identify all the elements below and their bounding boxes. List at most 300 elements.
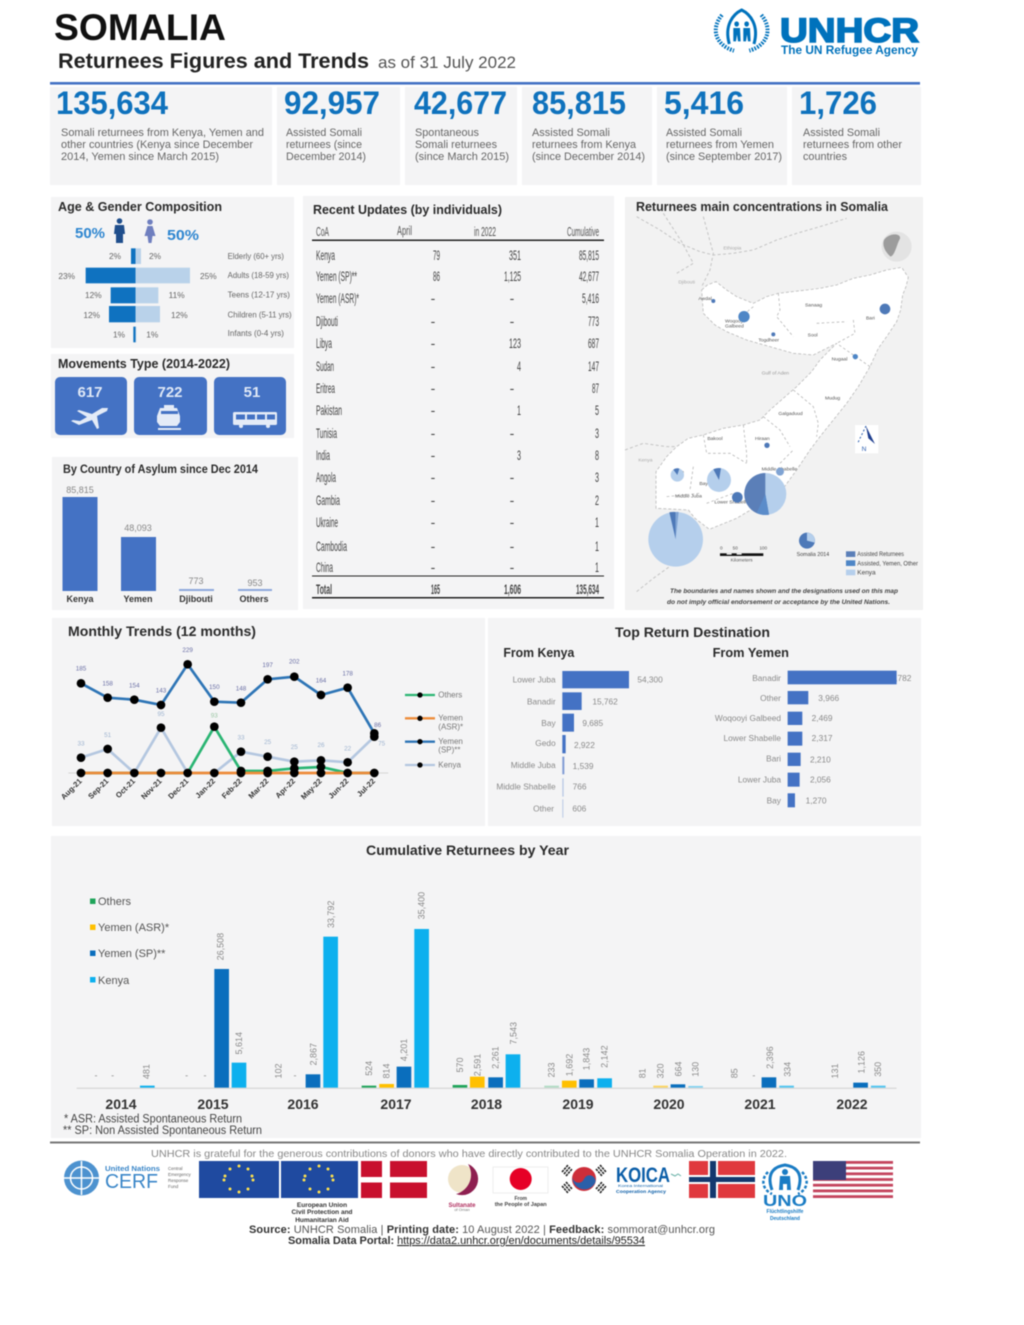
- bar chart: from Kenya: 606: [572, 803, 587, 813]
- logo: UNO Fluechtlingshilfe: Deutschland: [770, 1216, 800, 1222]
- table rows: 2: [595, 492, 599, 508]
- logo: Japan: From: [514, 1196, 528, 1202]
- year axis labels: 2020: [653, 1096, 685, 1112]
- table rows: Yemen (SP)**: [316, 268, 357, 284]
- map disclaimer: do not imply official endorsement or acceptance by the United Nations.: [667, 599, 890, 606]
- map of Somalia: Mudug: [825, 395, 840, 401]
- bar chart: from Yemen: 2,469: [812, 713, 833, 723]
- table rows: -: [431, 514, 436, 530]
- line chart: monthly trends: 25: [291, 744, 298, 751]
- bar chart: from Kenya: Other: [533, 803, 554, 813]
- bar chart: from Kenya: From Kenya: [503, 645, 575, 660]
- map of Somalia: Galgaduud: [778, 411, 803, 417]
- bar chart: from Kenya: 766: [573, 782, 587, 792]
- line chart: monthly trends: 185: [76, 666, 87, 673]
- bar chart: cumulative by year: 320: [656, 1063, 666, 1078]
- panel: key figure total: 2014, Yemen since March 2015): [61, 151, 219, 163]
- panel: key figure from Yemen: [657, 85, 787, 185]
- table total row: [316, 581, 599, 597]
- footnotes: ** SP: Non Assisted Spontaneous Return: [63, 1125, 262, 1137]
- legend: monthly trends: (ASR)*: [438, 722, 463, 731]
- table rows: Libya: [316, 335, 332, 351]
- line chart: monthly trends: 154: [129, 682, 140, 689]
- table rows: 1: [517, 402, 521, 418]
- table rows: -: [431, 380, 436, 396]
- table total row: 165: [431, 581, 440, 597]
- table rows: 123: [509, 335, 521, 351]
- logo: Sultanate of Oman: of Oman: [454, 1207, 470, 1212]
- female share: 50%: [167, 227, 199, 244]
- line chart: monthly trends: 51: [104, 732, 112, 739]
- logo: EU flags: European Union: [297, 1202, 347, 1209]
- table rows: -: [431, 313, 436, 329]
- map legend: Assisted, Yemen, Other: [857, 561, 918, 567]
- scale bar: [720, 545, 829, 562]
- line chart: monthly trends: 202: [289, 659, 300, 666]
- bar chart: cumulative by year: 102: [273, 1063, 283, 1078]
- bar chart: from Kenya: Middle Juba: [511, 760, 556, 770]
- bar chart: cumulative by year: 2,591: [472, 1054, 482, 1076]
- bar chart: cumulative by year: 81: [638, 1068, 648, 1078]
- bar chart: cumulative by year: 1,126: [857, 1051, 867, 1074]
- line chart: monthly trends: Mar-22: [247, 777, 270, 801]
- legend: cumulative: Yemen (SP)**: [98, 948, 166, 960]
- map of Somalia: Middle Juba: [675, 493, 702, 499]
- map of Somalia: Galbeed: [725, 323, 744, 329]
- table rows: -: [431, 492, 436, 508]
- panel: key figure total: Somali returnees from Kenya, Yemen and: [61, 127, 264, 139]
- title: SOMALIA: [54, 7, 226, 48]
- logo: UNHCR: UNHCR: [780, 12, 919, 50]
- table rows: Eritrea: [316, 380, 335, 396]
- panel: key figure spontaneous: Spontaneous: [415, 127, 479, 139]
- bar chart: from Kenya: Bay: [541, 718, 556, 728]
- table rows: -: [510, 380, 515, 396]
- panel: key figure assisted: Assisted Somali: [286, 127, 362, 139]
- population pyramid: 12%: [85, 290, 102, 300]
- population pyramid: Infants (0-4 yrs): [228, 328, 284, 338]
- flag: USA: [813, 1161, 893, 1198]
- year axis labels: 2022: [836, 1096, 868, 1112]
- logo: EU flags: Humanitarian Aid: [295, 1217, 349, 1224]
- map of Somalia: Awdal: [698, 296, 712, 302]
- heading: asylum: By Country of Asylum since Dec 2014: [63, 464, 259, 476]
- panel: key figure assisted: December 2014): [286, 151, 366, 163]
- panel: key figure from Kenya: returnees from Kenya: [532, 139, 637, 151]
- table rows: 3: [595, 469, 599, 485]
- bar chart: cumulative by year: 33,792: [326, 901, 336, 928]
- table rows: 79: [433, 247, 440, 263]
- line chart: monthly trends: Apr-22: [274, 777, 297, 800]
- bar chart: from Yemen: 2,056: [810, 775, 831, 785]
- table rows: -: [431, 335, 436, 351]
- population pyramid: 12%: [171, 310, 188, 320]
- bar chart: from Yemen: Bari: [766, 753, 781, 763]
- line chart: monthly trends: Aug-21: [59, 776, 84, 801]
- panel: recent updates table: 87: [592, 380, 599, 396]
- panel: top return destination: [488, 618, 921, 826]
- table rows: 8: [595, 447, 599, 463]
- legend: monthly trends: [405, 690, 463, 769]
- bar chart: from Kenya: 54,300: [637, 675, 663, 685]
- line chart: monthly trends: 33: [77, 741, 85, 748]
- line chart: monthly trends: Jun-22: [327, 777, 350, 801]
- globe inset: [882, 232, 912, 262]
- bar chart: cumulative by year: 2,867: [308, 1043, 318, 1066]
- population pyramid: 12%: [83, 310, 101, 320]
- map of Somalia: Togdheer: [758, 338, 779, 344]
- line chart: monthly trends: Jul-22: [355, 777, 377, 799]
- bar chart: from Yemen: Other: [760, 693, 781, 703]
- map disclaimer: The boundaries and names shown and the designations used on this map: [670, 588, 898, 595]
- line chart: monthly trends: 25: [264, 739, 272, 746]
- bar chart: cumulative by year: 5,614: [234, 1032, 244, 1055]
- map of Somalia: Bakool: [707, 436, 723, 442]
- bar chart: cumulative by year: 85: [729, 1068, 739, 1078]
- logo: EU flags: Civil Protection and: [291, 1209, 353, 1216]
- population pyramid: [58, 248, 292, 342]
- bar chart: cumulative by year: 2,396: [765, 1046, 775, 1069]
- bar chart: cumulative by year: 26,508: [216, 933, 226, 960]
- logo: CERF: [64, 1160, 192, 1196]
- bar chart: asylum: Kenya: [66, 594, 94, 604]
- legend: cumulative: [90, 896, 170, 987]
- table rows: Gambia: [316, 492, 340, 508]
- bar chart: cumulative by year: -: [752, 1070, 755, 1080]
- logo: KOICA: Cooperation Agency: [616, 1189, 667, 1194]
- panel: key figure from Kenya: [522, 85, 652, 185]
- bar chart: from Yemen: 2,210: [810, 755, 831, 765]
- bar chart: from Yemen: 2,317: [812, 733, 833, 743]
- table rows: Djibouti: [316, 313, 338, 329]
- bar chart: cumulative by year: 570: [455, 1057, 465, 1072]
- bar chart: from Kenya: Banadir: [527, 696, 556, 706]
- panel: key figure other countries: 1,726: [799, 85, 877, 121]
- table rows: 1: [595, 538, 599, 554]
- bar chart: cumulative by year: 664: [673, 1061, 683, 1076]
- population pyramid: Teens (12-17 yrs): [228, 290, 290, 300]
- year axis labels: 2016: [287, 1096, 319, 1112]
- population pyramid: 25%: [200, 271, 217, 281]
- panel: key figure from Kenya: (since December 2014): [532, 151, 645, 163]
- panel: key figure spontaneous: Somali returnees: [415, 139, 497, 151]
- panel: map of returnee concentrations: [625, 197, 923, 610]
- panel: recent updates table: Cumulative: [567, 224, 599, 239]
- year axis labels: 2014: [105, 1096, 137, 1112]
- legend: monthly trends: (SP)**: [438, 746, 460, 755]
- table rows: -: [431, 425, 436, 441]
- table rows: -: [510, 313, 515, 329]
- map of Somalia: Gedo: [672, 469, 684, 475]
- line chart: monthly trends: 26: [317, 742, 325, 749]
- map of Somalia: Woqooyi: [725, 319, 744, 325]
- table rows: Yemen (ASR)*: [316, 290, 359, 306]
- heading: cumulative returnees: Cumulative Returnees by Year: [366, 842, 570, 858]
- legend: cumulative: Kenya: [98, 975, 130, 987]
- bar chart: from Yemen: [713, 645, 912, 807]
- heading: top return destination: Top Return Destination: [615, 624, 770, 640]
- map of Somalia: Ethiopia: [723, 245, 742, 251]
- logo: UNO Fluechtlingshilfe: [763, 1165, 807, 1222]
- logo: Japan: [493, 1167, 548, 1208]
- table rows: 351: [509, 247, 521, 263]
- logo: CERF: Fund: [168, 1184, 179, 1189]
- map of Somalia: Lower Shabelle: [714, 499, 749, 505]
- bar chart: from Kenya: Middle Shabelle: [496, 782, 556, 792]
- logo: KOICA: KOICA: [616, 1164, 670, 1187]
- bar chart: from Kenya: [496, 645, 663, 818]
- line chart: monthly trends: 22: [344, 746, 352, 753]
- table rows: -: [431, 447, 436, 463]
- map of Somalia: Hiraan: [755, 436, 770, 442]
- map of Somalia: Kenya: [638, 458, 653, 464]
- scale bar: 0: [720, 545, 723, 550]
- logo: CERF: Central: [168, 1166, 183, 1171]
- panel: monthly trends: [52, 618, 485, 826]
- population pyramid: 1%: [146, 329, 159, 339]
- population pyramid: 1%: [113, 329, 126, 339]
- map of Somalia: Bay: [699, 481, 708, 487]
- female share: [144, 219, 199, 244]
- scale bar: Somalia 2014: [797, 552, 829, 558]
- bar chart: from Kenya: 9,685: [582, 718, 604, 728]
- map legend: Kenya: [857, 571, 876, 577]
- table rows: 4: [517, 358, 521, 374]
- line chart: monthly trends: Sep-21: [86, 776, 111, 801]
- table rows: -: [510, 425, 515, 441]
- bar chart: cumulative by year: -: [185, 1070, 188, 1080]
- line chart: monthly trends: 178: [342, 671, 353, 678]
- table header: in 2022: [474, 224, 496, 239]
- panel: key figure from Yemen: (since September 2017): [666, 151, 782, 163]
- logo: EU flags: [199, 1161, 358, 1224]
- male share: [75, 218, 125, 243]
- data portal line: Somalia Data Portal: https://data2.unhcr.org/en/documents/details/95534: [288, 1235, 645, 1247]
- table rows: -: [431, 358, 436, 374]
- table rows: 5: [595, 402, 599, 418]
- population pyramid: 2%: [149, 251, 162, 261]
- panel: key figure from Yemen: 5,416: [664, 85, 744, 121]
- line chart: monthly trends: 93: [211, 712, 218, 719]
- year axis labels: 2019: [562, 1096, 594, 1112]
- card: road: [214, 377, 286, 435]
- table rows: Angola: [316, 469, 336, 485]
- bar chart: from Kenya: Gedo: [535, 738, 556, 748]
- panel: key figure from Yemen: Assisted Somali: [666, 127, 742, 139]
- table rows: -: [431, 290, 436, 306]
- year axis labels: 2021: [744, 1096, 776, 1112]
- bar chart: cumulative by year: 1,843: [582, 1048, 592, 1070]
- bar chart: from Yemen: Woqooyi Galbeed: [715, 713, 781, 723]
- population pyramid: 2%: [109, 251, 122, 261]
- bar chart: cumulative by year: 130: [691, 1062, 701, 1077]
- logo: UNO Fluechtlingshilfe: Flüchtlingshilfe: [767, 1209, 804, 1215]
- legend: monthly trends: Yemen: [438, 714, 463, 723]
- line chart: monthly trends: 197: [262, 662, 273, 669]
- line chart: monthly trends: 75: [378, 741, 386, 748]
- bar chart: from Kenya: Lower Juba: [513, 675, 556, 685]
- table rows: 86: [433, 268, 440, 284]
- north arrow inset: [855, 425, 878, 453]
- panel: cumulative returnees by year: [51, 836, 921, 1138]
- logo: UNHCR: [716, 10, 919, 57]
- table rows: Kenya: [316, 247, 335, 263]
- table rows: Tunisia: [316, 425, 337, 441]
- table total row: Total: [316, 581, 332, 597]
- table rows: Pakistan: [316, 402, 342, 418]
- bar chart: cumulative by year: 131: [830, 1063, 840, 1078]
- map of Somalia: Sool: [808, 333, 818, 339]
- table rows: 3: [595, 425, 599, 441]
- scale bar: 50: [733, 545, 738, 550]
- bar chart: from Yemen: 20,782: [886, 673, 912, 683]
- panel: key figure spontaneous: (since March 2015): [415, 151, 509, 163]
- heading: map: Returnees main concentrations in Somalia: [636, 199, 889, 214]
- logo: UNHCR: The UN Refugee Agency: [781, 43, 918, 57]
- logo: CERF: United Nations: [105, 1166, 160, 1173]
- flag: Denmark: [361, 1161, 427, 1198]
- logo: Sultanate of Oman: Sultanate: [448, 1203, 476, 1209]
- table rows: Cambodia: [316, 538, 347, 554]
- table rows: -: [431, 469, 436, 485]
- bar chart: cumulative by year: 233: [547, 1062, 557, 1077]
- bar chart: from Kenya: 15,762: [592, 696, 618, 706]
- population pyramid: Elderly (60+ yrs): [228, 251, 284, 261]
- bar chart: from Yemen: 3,966: [818, 693, 840, 703]
- legend: monthly trends: Yemen: [438, 737, 463, 746]
- panel: recent updates table: 147: [588, 358, 599, 374]
- bar chart: cumulative by year: [77, 892, 897, 1088]
- table rows: 1: [595, 514, 599, 530]
- table rows: -: [510, 492, 515, 508]
- line chart: monthly trends: Oct-21: [114, 776, 138, 800]
- north arrow inset: N: [862, 446, 867, 453]
- bar chart: cumulative by year: 7,543: [508, 1022, 518, 1045]
- heading: age and gender: Age & Gender Composition: [58, 199, 222, 214]
- legend: cumulative: Yemen (ASR)*: [98, 922, 170, 934]
- panel: recent updates table: 85,815: [579, 247, 599, 263]
- panel: key figure total: other countries (Kenya since December: [61, 139, 253, 151]
- logo: CERF: Response: [168, 1178, 189, 1183]
- table rows: India: [316, 447, 330, 463]
- bar chart: cumulative by year: -: [111, 1070, 114, 1080]
- bar chart: cumulative by year: 35,400: [417, 892, 427, 919]
- panel: key figure other countries: returnees from other: [803, 139, 902, 151]
- logo: UNO Fluechtlingshilfe: UNO: [763, 1193, 807, 1210]
- map of Somalia: Middle Shabelle: [762, 467, 797, 473]
- line chart: monthly trends: 86: [374, 722, 382, 729]
- bar chart: cumulative by year: 814: [382, 1063, 392, 1078]
- panel: age and gender composition: [51, 197, 294, 348]
- logo: KOICA: Korea International: [618, 1183, 663, 1188]
- panel: recent updates table: 773: [588, 313, 599, 329]
- bar chart: asylum: Others: [239, 594, 269, 604]
- map of Somalia: Bari: [866, 315, 875, 321]
- bar chart: cumulative by year: -: [293, 1070, 296, 1080]
- table rows: -: [431, 559, 436, 575]
- panel: by country of asylum: [52, 457, 298, 610]
- bar chart: from Yemen: From Yemen: [713, 645, 789, 660]
- bar chart: asylum: Djibouti: [179, 594, 213, 604]
- year axis labels: 2017: [380, 1096, 412, 1112]
- table rows: China: [316, 559, 333, 575]
- bar chart: cumulative by year: 524: [364, 1061, 374, 1076]
- subtitle: [58, 50, 516, 73]
- card: sea: 722: [157, 384, 183, 401]
- line chart: monthly trends: May-22: [299, 777, 324, 801]
- bar chart: cumulative by year: -: [94, 1070, 97, 1080]
- card: sea: [134, 377, 207, 435]
- panel: key figure other countries: [792, 85, 921, 185]
- bar chart: from Yemen: Banadir: [752, 673, 781, 683]
- footnotes: [63, 1114, 262, 1137]
- heading: movements: Movements Type (2014-2022): [58, 356, 230, 371]
- bar chart: cumulative by year: 4,201: [399, 1039, 409, 1061]
- table rows: 1,125: [504, 268, 521, 284]
- panel: key figure from Kenya: Assisted Somali: [532, 127, 610, 139]
- line chart: monthly trends: Dec-21: [166, 776, 191, 801]
- map of Somalia: Gulf of Aden: [762, 370, 789, 376]
- bar chart: cumulative by year: 334: [782, 1062, 792, 1077]
- bar chart: cumulative by year: 2,142: [599, 1045, 609, 1068]
- panel: key figure assisted: returnees (since: [286, 139, 362, 151]
- table rows: -: [510, 469, 515, 485]
- bar chart: cumulative by year: 1,692: [564, 1054, 574, 1076]
- panel: key figure spontaneous: [405, 85, 517, 185]
- panel: key figure other countries: countries: [803, 151, 847, 163]
- panel: recent updates table: 135,634: [576, 581, 599, 597]
- bar chart: from Yemen: Lower Shabelle: [724, 733, 781, 743]
- line chart: monthly trends: Feb-22: [220, 777, 244, 801]
- bar chart: from Yemen: 1,270: [806, 795, 827, 805]
- line chart: monthly trends: 33: [237, 734, 245, 741]
- table rows: -: [510, 538, 515, 554]
- card: air: [55, 377, 127, 435]
- line chart: monthly trends: [59, 647, 463, 801]
- table rows: -: [510, 514, 515, 530]
- scale bar: Kilometers: [731, 557, 753, 562]
- legend: monthly trends: Others: [438, 690, 462, 699]
- card: road: 51: [244, 384, 260, 401]
- table rows: -: [510, 559, 515, 575]
- bar chart: cumulative by year: 2,261: [491, 1046, 501, 1069]
- panel: key figure from Kenya: 85,815: [532, 85, 626, 121]
- line chart: monthly trends: Nov-21: [139, 776, 164, 801]
- line chart: monthly trends: 158: [102, 680, 113, 687]
- panel: movements type: [51, 354, 294, 438]
- panel: recent updates table: 5,416: [582, 290, 599, 306]
- panel: key figure total: [50, 85, 272, 185]
- map of Somalia: Nugaal: [832, 357, 847, 363]
- line chart: monthly trends: 143: [156, 687, 167, 694]
- population pyramid: Children (5-11 yrs): [228, 310, 292, 320]
- subtitle: as of 31 July 2022: [378, 54, 516, 72]
- population pyramid: 11%: [169, 290, 185, 300]
- table header: [316, 223, 599, 239]
- legend: cumulative: Others: [98, 896, 132, 908]
- bar chart: asylum: Yemen: [123, 594, 153, 604]
- bar chart: asylum: 773: [188, 576, 204, 586]
- bar chart: asylum: [62, 485, 272, 604]
- footer rule: [50, 1142, 920, 1144]
- legend: monthly trends: Kenya: [438, 760, 461, 769]
- line chart: monthly trends: 95: [157, 711, 165, 718]
- year axis labels: 2015: [197, 1096, 229, 1112]
- logo: CERF: Emergency: [168, 1172, 192, 1177]
- table rows: 1: [595, 559, 599, 575]
- bar chart: cumulative by year: 481: [142, 1064, 152, 1079]
- panel: key figure spontaneous: 42,677: [414, 85, 507, 121]
